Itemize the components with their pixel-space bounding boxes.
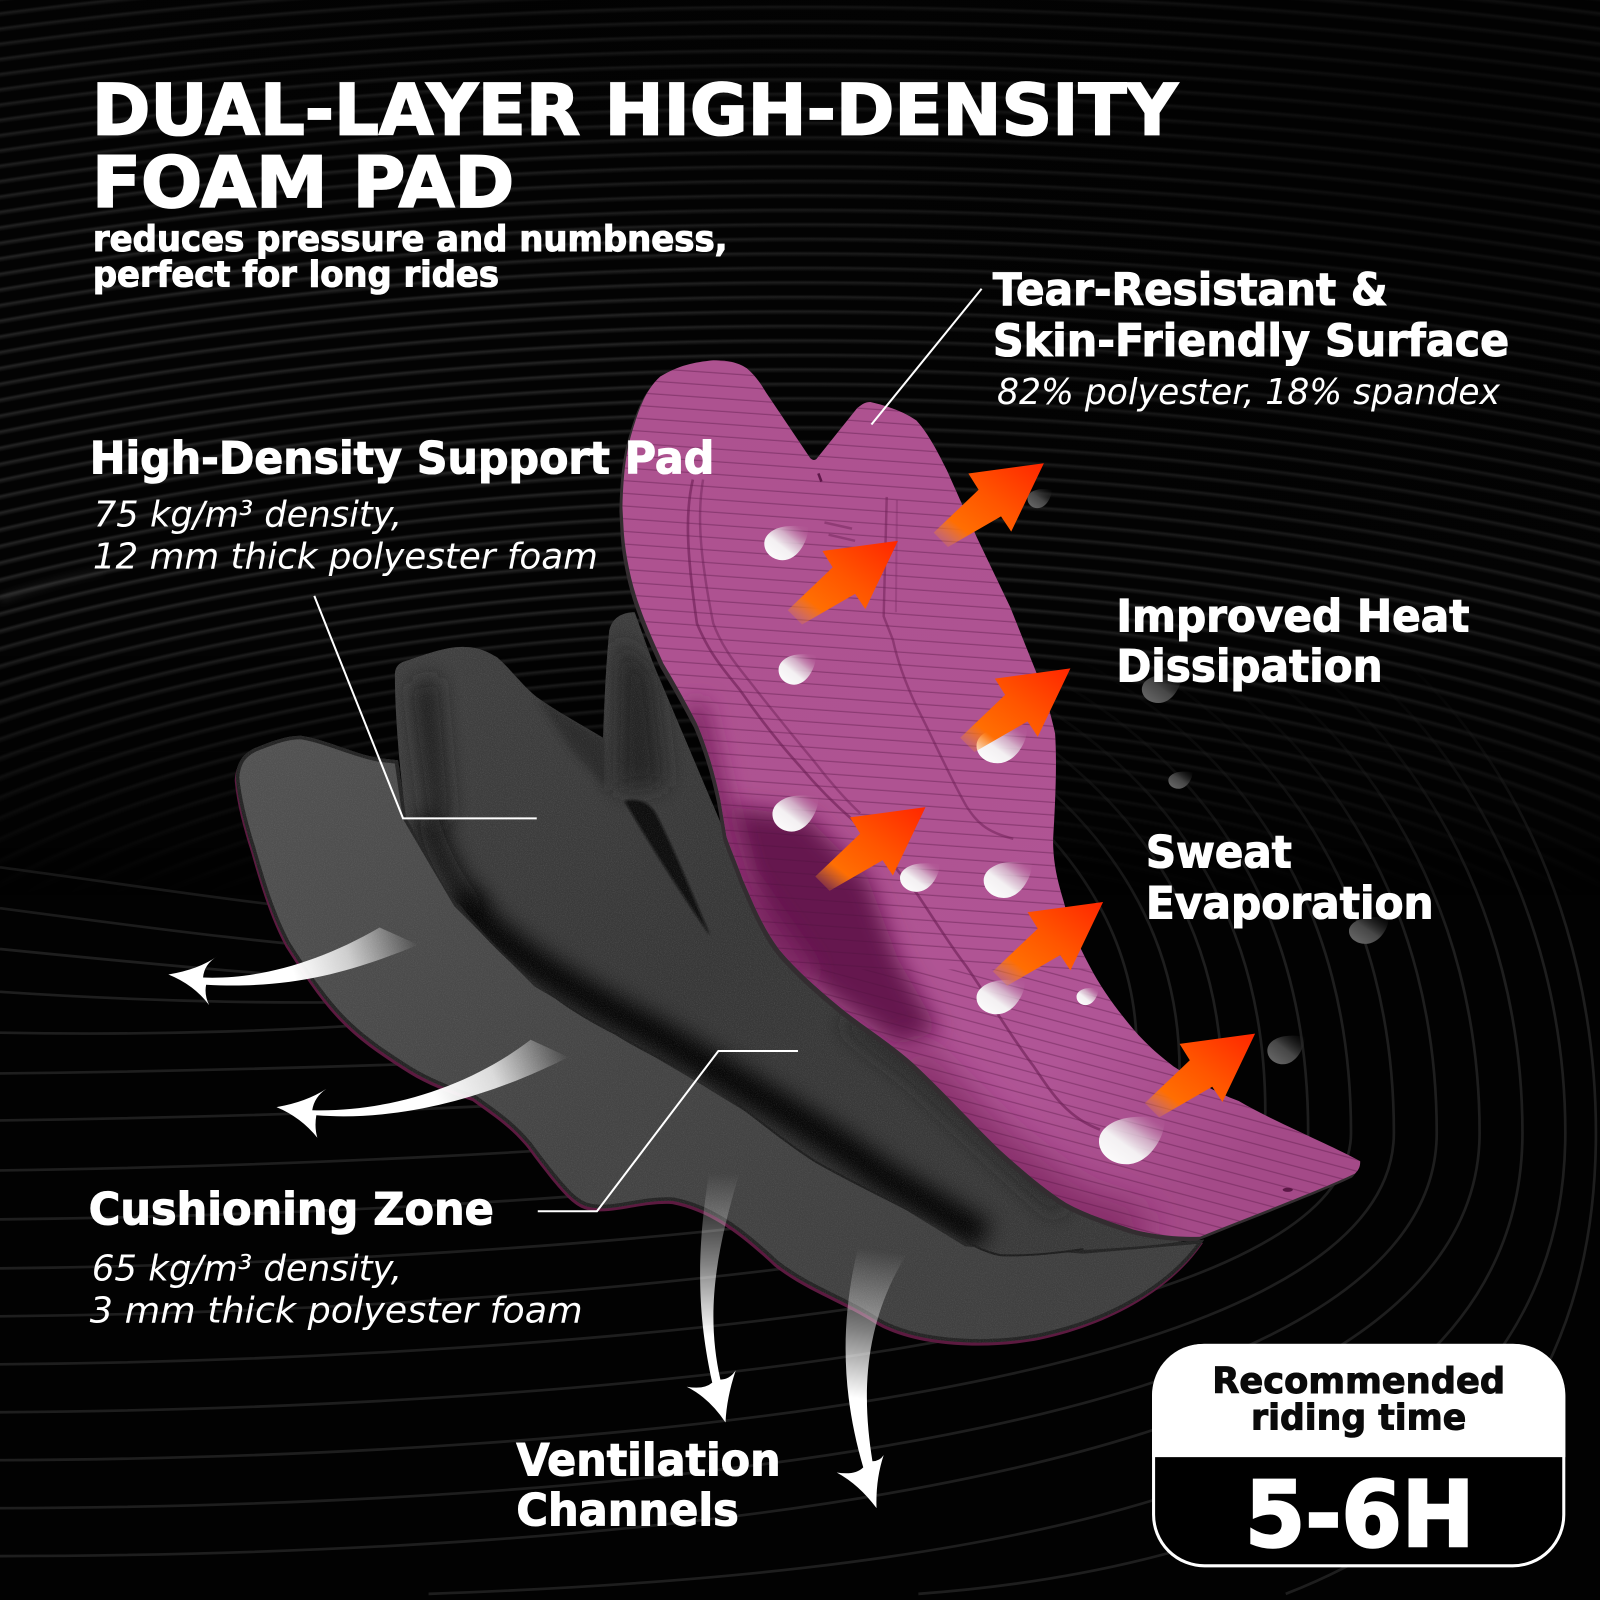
label: cushioning zone: Cushioning Zone — [89, 1182, 494, 1235]
airflow arrow left upper — [168, 928, 418, 1005]
label: high-density support pad: 75 kg/m³ density, — [94, 495, 402, 536]
recommended riding time card — [1152, 1344, 1565, 1568]
orange heat arrows — [788, 463, 1255, 1117]
airflow arrow left lower — [277, 1040, 568, 1138]
top pink layer: skin-friendly surface — [612, 347, 1388, 1265]
label: ventilation channels: Channels — [516, 1484, 739, 1537]
air droplet 3 — [1168, 772, 1192, 789]
label: improved heat dissipation: Dissipation — [1116, 640, 1383, 693]
droplet 9 — [1099, 1117, 1165, 1164]
arrow 4 — [815, 807, 926, 891]
label: high-density support pad: 12 mm thick polyester foam — [93, 536, 598, 577]
label: tear-resistant surface — [993, 263, 1509, 413]
label: ventilation channels — [516, 1434, 781, 1537]
arrow 5 — [993, 902, 1103, 986]
card heading: Recommended — [1212, 1361, 1505, 1402]
arrow 3 — [960, 668, 1070, 752]
droplet 5 — [900, 863, 939, 892]
air droplet 4 — [1349, 917, 1388, 944]
subtitle: reduces pressure and numbness, — [93, 219, 728, 260]
airflow arrow bottom right — [837, 1247, 906, 1508]
label: tear-resistant surface: Tear-Resistant & — [993, 263, 1388, 316]
label: tear-resistant surface: Skin-Friendly Surface — [993, 314, 1509, 367]
white airflow arrows — [168, 928, 906, 1508]
arrow 1 — [934, 463, 1044, 547]
label: cushioning zone: 65 kg/m³ density, — [92, 1249, 402, 1290]
background: concentric lines upper — [0, 0, 1600, 818]
bottom foam layer: cushioning zone — [224, 714, 1224, 1357]
title: FOAM PAD — [92, 142, 514, 224]
label: sweat evaporation: Evaporation — [1146, 876, 1434, 929]
leader line: cushioning zone — [538, 1051, 798, 1211]
title: DUAL-LAYER HIGH-DENSITY — [92, 70, 1179, 152]
droplet 7 — [977, 980, 1025, 1014]
middle foam layer: high-density support pad — [388, 607, 1214, 1260]
card value: 5-6H — [1245, 1463, 1474, 1568]
droplet 2 — [779, 654, 816, 685]
background: lower rings — [0, 561, 1596, 1594]
left streak light — [0, 569, 102, 602]
droplet 4 — [772, 795, 819, 832]
droplet 3 — [977, 727, 1027, 763]
evaporating droplets in the air — [1028, 489, 1388, 1064]
leader line: surface — [871, 289, 982, 424]
label: sweat evaporation: Sweat — [1146, 825, 1292, 878]
leader line: support pad — [314, 596, 537, 818]
card white header — [1152, 1344, 1565, 1457]
label: cushioning zone — [89, 1182, 583, 1331]
arrow 2 — [788, 541, 898, 624]
foam pad illustration — [224, 347, 1388, 1357]
arrow 6 — [1145, 1034, 1255, 1117]
label: improved heat dissipation — [1116, 590, 1469, 693]
subtitle: perfect for long rides — [93, 255, 499, 296]
droplet 1 — [764, 526, 808, 560]
card heading — [1212, 1361, 1505, 1439]
air droplet 1 — [1028, 489, 1052, 508]
label: sweat evaporation — [1146, 825, 1434, 929]
droplet 6 — [984, 862, 1032, 898]
air droplet 5 — [1267, 1036, 1305, 1064]
card outline — [1154, 1345, 1564, 1566]
card heading: riding time — [1251, 1398, 1466, 1439]
label: tear-resistant surface: 82% polyester, 18% spandex — [997, 372, 1501, 413]
title — [92, 70, 1179, 224]
label: cushioning zone: 3 mm thick polyester foam — [90, 1290, 583, 1331]
label: ventilation channels: Ventilation — [516, 1434, 781, 1487]
droplet 8 — [1077, 988, 1098, 1005]
label: high-density support pad — [90, 431, 714, 577]
airflow arrow bottom left — [687, 1172, 740, 1422]
label: improved heat dissipation: Improved Heat — [1116, 590, 1469, 643]
subtitle — [93, 219, 728, 296]
label: high-density support pad: High-Density Support Pad — [90, 431, 714, 484]
air droplet 2 — [1142, 674, 1181, 703]
sweat droplets on the pad — [764, 526, 1165, 1164]
